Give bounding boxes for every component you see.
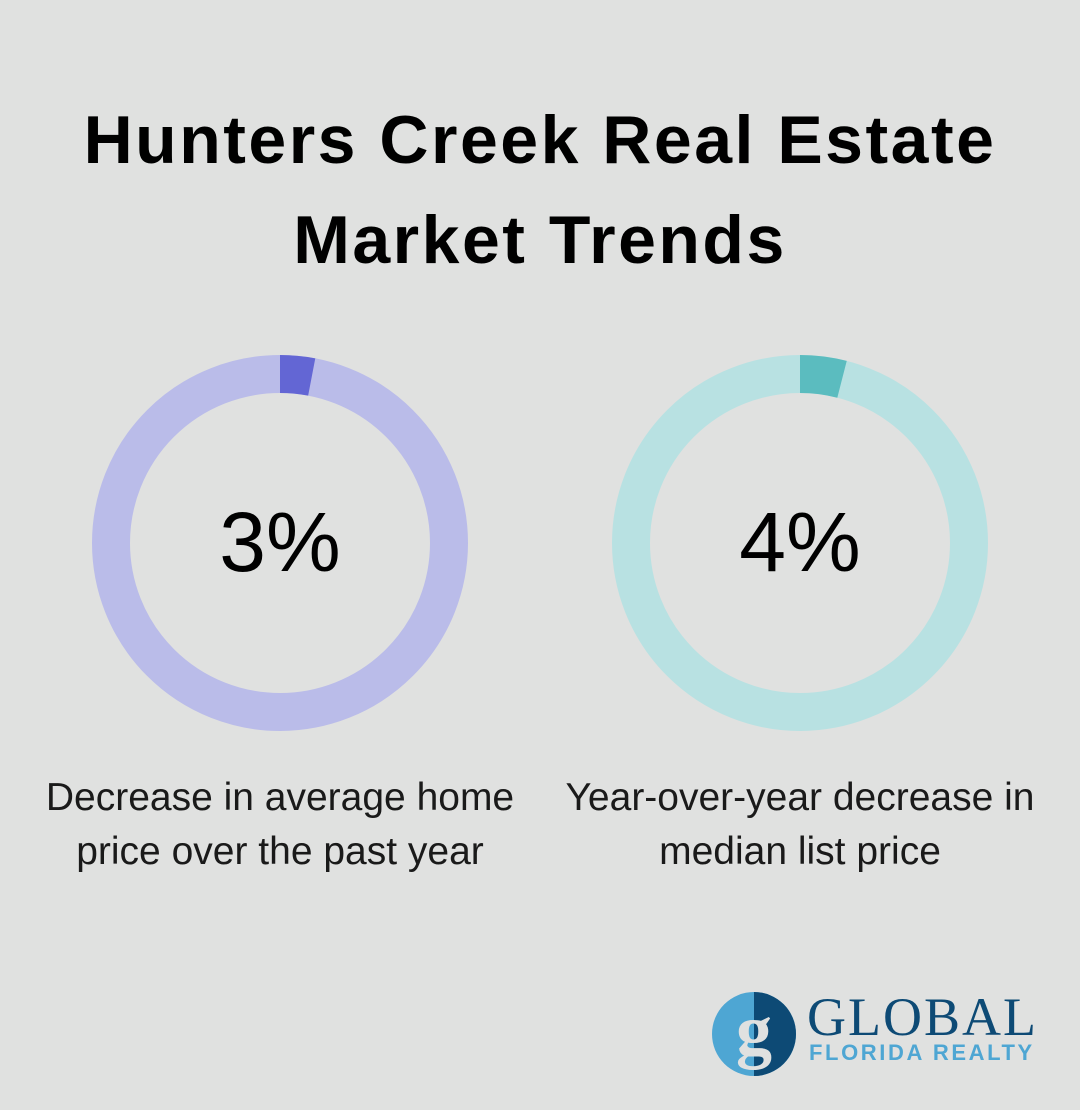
label: 3%: Decrease in average home bbox=[46, 776, 514, 819]
label: 4%: median list price bbox=[659, 830, 941, 873]
title: Hunters Creek Real Estate bbox=[84, 102, 996, 178]
title bbox=[84, 102, 996, 278]
label: 3% bbox=[46, 776, 514, 873]
icon: g circle: g bbox=[736, 990, 772, 1070]
donut chart: 4%: 4% bbox=[739, 495, 861, 589]
icon: g circle bbox=[712, 990, 796, 1076]
logo text: GLOBAL bbox=[807, 987, 1038, 1047]
label: 4%: Year-over-year decrease in bbox=[566, 776, 1034, 819]
logo: FLORIDA REALTY bbox=[809, 1040, 1035, 1065]
label: 4% bbox=[566, 776, 1034, 873]
donut chart: 3%: 3% bbox=[219, 495, 341, 589]
logo bbox=[712, 987, 1038, 1076]
donut chart: 4% bbox=[612, 355, 988, 731]
label: 3%: price over the past year bbox=[76, 830, 484, 873]
donut chart: 3% bbox=[92, 355, 468, 731]
title: Market Trends bbox=[293, 202, 787, 278]
